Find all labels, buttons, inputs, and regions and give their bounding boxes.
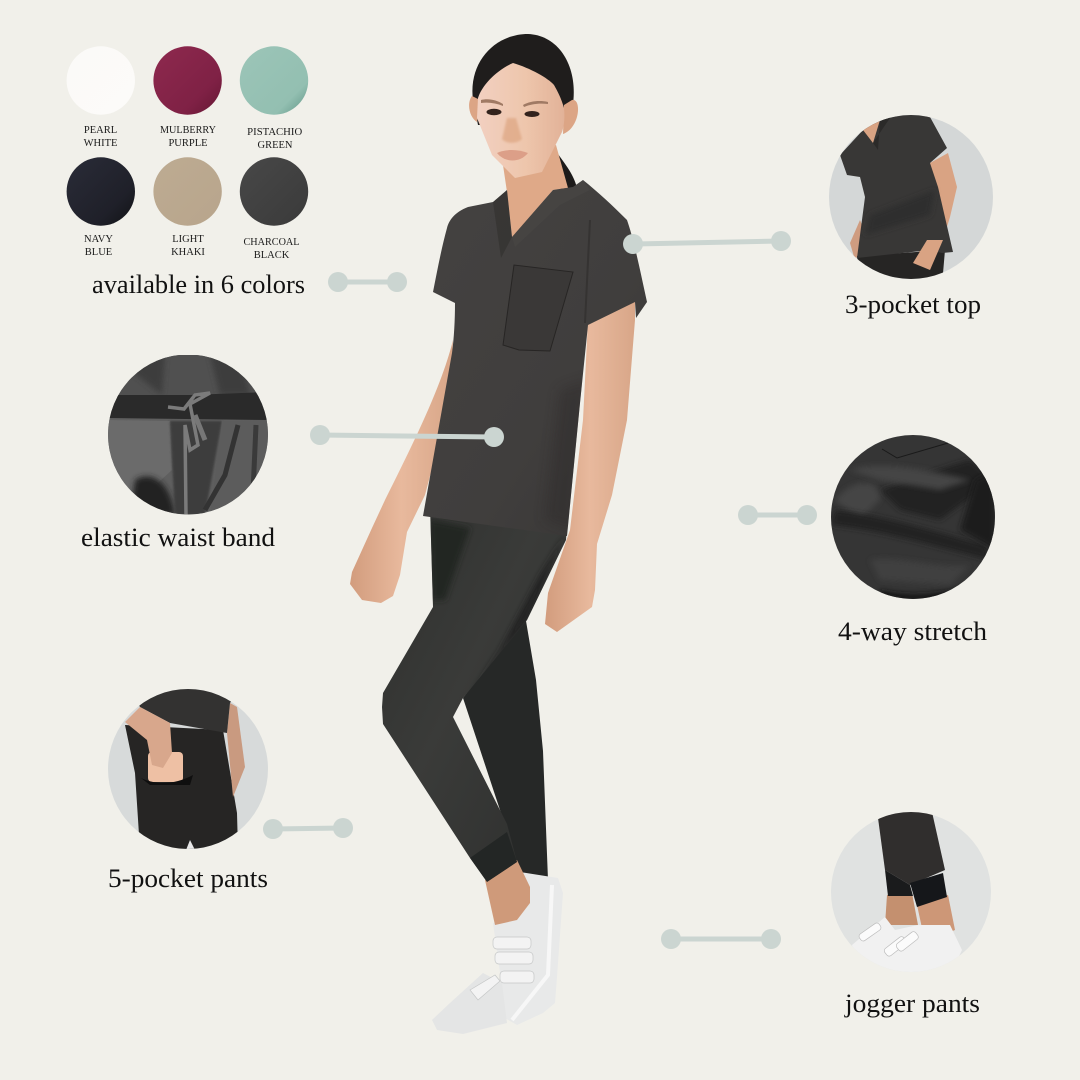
shirt [423, 180, 647, 536]
figure: model in charcoal scrubs [350, 34, 647, 1034]
connector: top pocket [623, 231, 791, 254]
swatch: light khaki: LIGHT [172, 234, 204, 245]
swatch: pearl white: WHITE [84, 138, 117, 149]
connector: stretch [738, 505, 817, 525]
lips [497, 150, 528, 160]
nose shadow [502, 118, 522, 143]
swatch: navy blue: NAVY [84, 234, 113, 245]
heading: available in 6 colors: available in 6 colors [92, 270, 305, 299]
swatch: light khaki [153, 157, 222, 258]
shirt details [493, 180, 590, 530]
label: elastic waist band: elastic waist band [81, 523, 275, 552]
panel: 3-pocket top [829, 113, 993, 319]
shoe straps [470, 937, 534, 1000]
shin [485, 860, 530, 925]
connector: jogger [661, 929, 781, 949]
right arm [545, 298, 635, 632]
connector: colors [328, 272, 407, 292]
label: 4-way stretch: 4-way stretch [838, 617, 987, 646]
photo: fabric detail [831, 435, 995, 600]
swatch: charcoal black [240, 157, 308, 261]
photo: waist band detail [108, 355, 268, 515]
panel: elastic waist band [81, 355, 275, 552]
connector: pants pockets [263, 818, 353, 839]
panel: 5-pocket pants [108, 689, 268, 893]
swatch: navy blue: BLUE [85, 247, 112, 258]
ponytail [552, 150, 577, 192]
swatch: pistachio green [240, 46, 308, 151]
swatch: mulberry purple: MULBERRY [160, 125, 216, 136]
back leg [463, 615, 548, 880]
label: 5-pocket pants: 5-pocket pants [108, 864, 268, 893]
back shoe sole highlight [512, 885, 552, 1020]
back shoe [493, 872, 563, 1025]
photo: top detail [829, 113, 993, 285]
swatch: charcoal black: CHARCOAL [244, 237, 300, 248]
face [477, 63, 564, 178]
panel: 4-way stretch [831, 435, 995, 646]
photo: jogger cuff detail [831, 812, 991, 956]
neck [503, 145, 568, 238]
front leg [382, 505, 567, 882]
swatch: light khaki: KHAKI [171, 247, 205, 258]
swatch: mulberry purple [153, 46, 222, 149]
swatch: pistachio green: PISTACHIO [247, 127, 303, 138]
hair [472, 34, 574, 125]
swatch: mulberry purple: PURPLE [168, 138, 208, 149]
swatch: pistachio green: GREEN [258, 140, 293, 151]
swatch: navy blue [67, 157, 135, 258]
ears [469, 96, 578, 134]
label: 3-pocket top: 3-pocket top [845, 290, 981, 319]
photo: pants pocket detail [108, 689, 268, 850]
left arm [350, 340, 453, 603]
eyes and brows [481, 99, 548, 117]
leg shading [430, 520, 565, 882]
label: jogger pants: jogger pants [844, 989, 980, 1018]
swatch: pearl white [67, 46, 135, 149]
front shoe [432, 973, 507, 1034]
panel: colour swatches [67, 46, 308, 261]
connector: waist band [310, 425, 504, 447]
swatch: charcoal black: BLACK [254, 250, 290, 261]
panel: jogger pants [831, 812, 991, 1018]
swatch: pearl white: PEARL [84, 125, 117, 136]
